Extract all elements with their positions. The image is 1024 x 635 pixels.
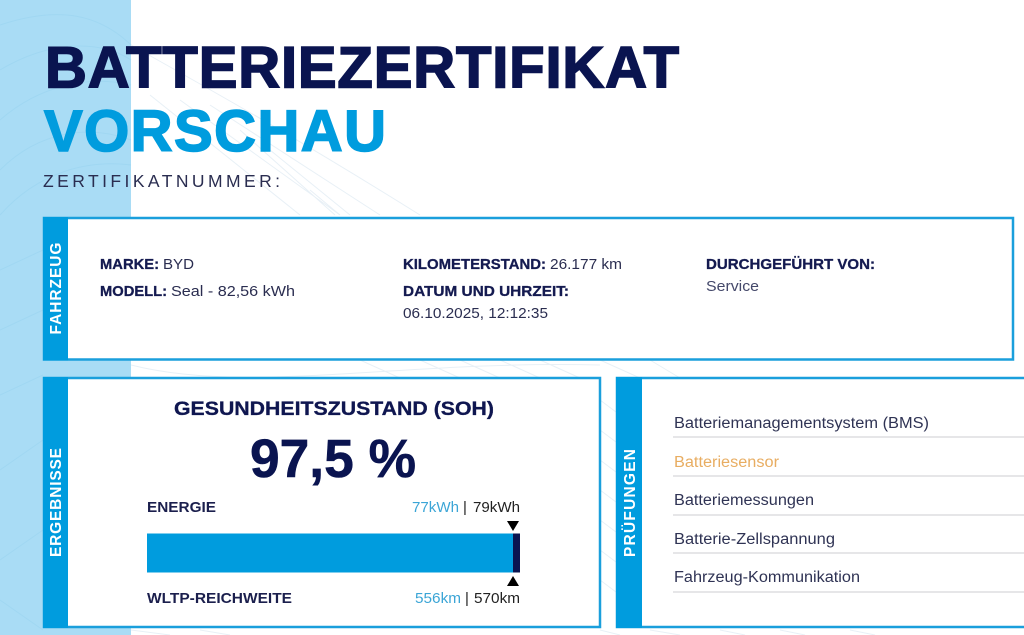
date and time: DATUM UND UHRZEIT: <box>403 284 569 300</box>
energy values: | <box>463 499 467 516</box>
check item: measurements: Batteriemessungen <box>674 492 814 509</box>
icon: top marker <box>507 521 519 531</box>
energy values: 77kWh <box>412 499 459 516</box>
panel: results <box>43 377 600 628</box>
date and time: 06.10.2025, 12:12:35 <box>403 306 548 322</box>
tab: Prüfungen: PRÜFUNGEN <box>622 449 639 557</box>
tab: Ergebnisse: ERGEBNISSE <box>48 448 65 557</box>
heading: state of health: GESUNDHEITSZUSTAND (SOH) <box>174 398 494 420</box>
tab: Prüfungen <box>616 377 642 628</box>
energy values: 79kWh <box>473 499 520 516</box>
performed by: Service <box>706 279 759 295</box>
range values <box>415 590 520 607</box>
make: MARKE: <box>100 257 159 273</box>
model: Seal - 82,56 kWh <box>171 284 295 300</box>
panel: vehicle <box>43 217 1013 360</box>
range values: 556km <box>415 590 461 607</box>
tab: Fahrzeug <box>43 217 68 360</box>
range values: | <box>465 590 469 607</box>
icon: bottom marker <box>507 576 519 586</box>
tab: Ergebnisse <box>43 377 68 628</box>
model <box>100 284 295 300</box>
subtitle: VORSCHAU <box>44 99 386 164</box>
mileage: 26.177 km <box>550 257 622 273</box>
energy values <box>412 499 520 516</box>
performed by <box>706 256 875 295</box>
energy label: ENERGIE <box>147 499 216 516</box>
mileage: KILOMETERSTAND: <box>403 257 546 273</box>
certificate number label: ZERTIFIKATNUMMER: <box>43 171 280 191</box>
tab: Fahrzeug: FAHRZEUG <box>48 242 65 334</box>
check item: BMS: Batteriemanagementsystem (BMS) <box>674 415 929 432</box>
range label: WLTP-REICHWEITE <box>147 590 292 607</box>
SOH value: 97,5 % <box>250 429 416 489</box>
mileage <box>403 257 622 273</box>
make: BYD <box>163 257 194 273</box>
panel: checks <box>616 377 1024 628</box>
model: MODELL: <box>100 284 167 300</box>
range values: 570km <box>474 590 520 607</box>
background: light blue band <box>0 0 131 635</box>
title: BATTERIEZERTIFIKAT <box>45 36 679 100</box>
performed by: DURCHGEFÜHRT VON: <box>706 256 875 273</box>
bar chart: capacity <box>147 534 520 572</box>
check item: cell voltage: Batterie-Zellspannung <box>674 531 835 548</box>
make <box>100 257 194 273</box>
check item: communication: Fahrzeug-Kommunikation <box>674 569 860 586</box>
date and time <box>403 284 569 322</box>
check item: sensor: Batteriesensor <box>674 454 779 471</box>
